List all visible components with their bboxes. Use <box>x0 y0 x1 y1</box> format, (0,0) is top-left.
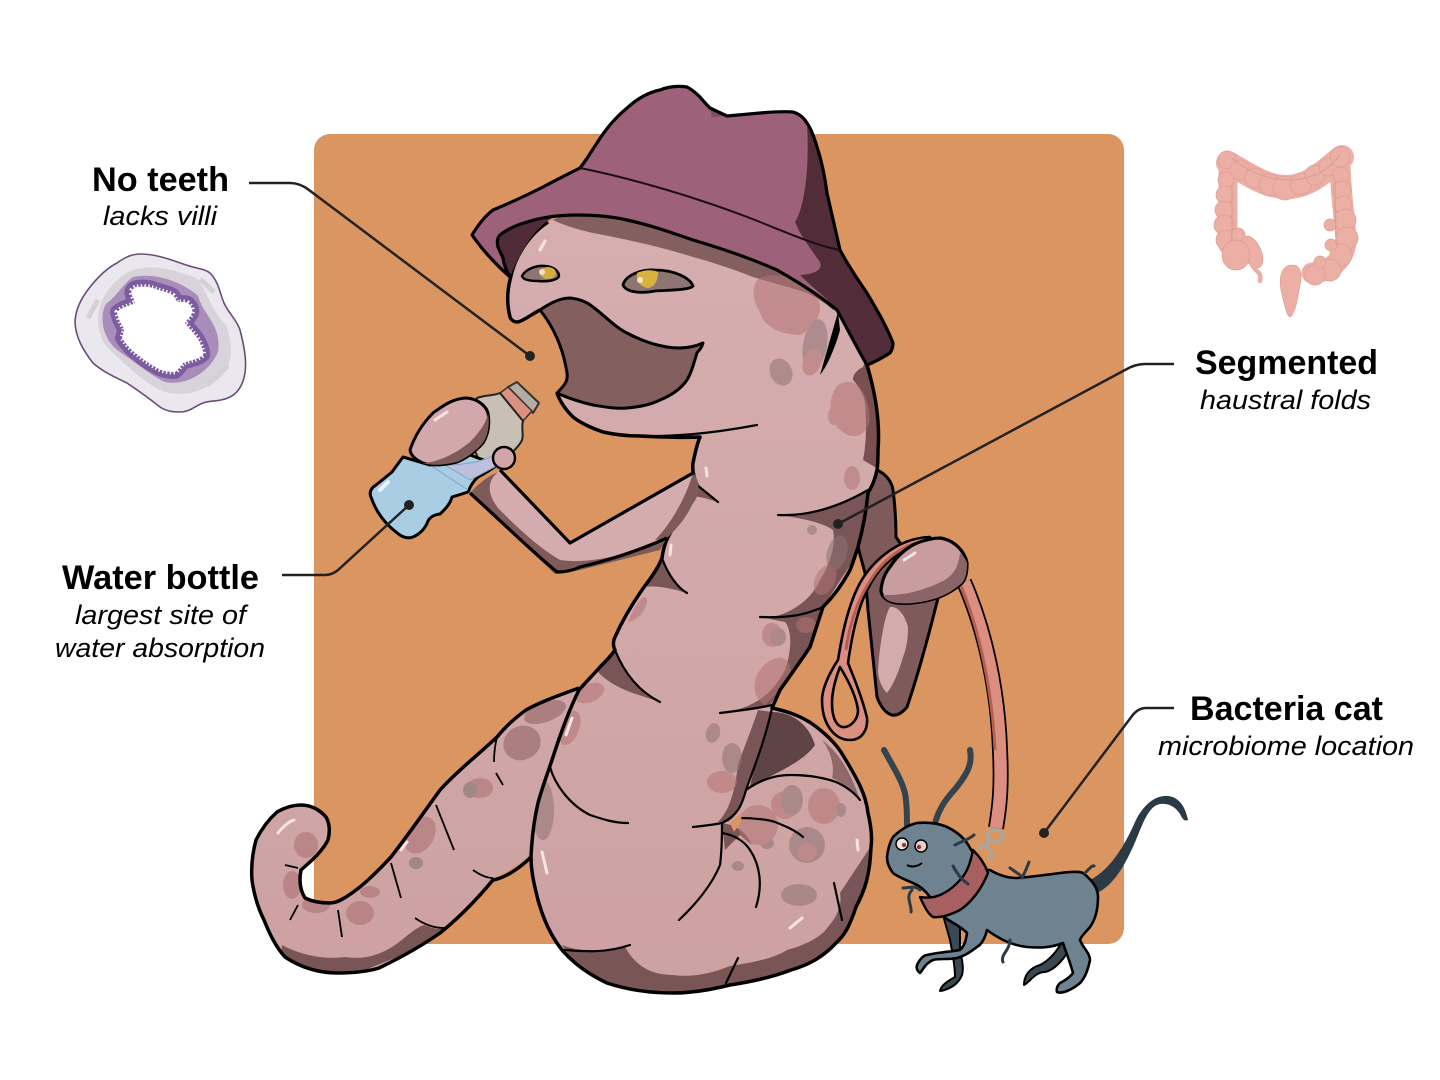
shadows and patches on body <box>532 190 885 1000</box>
leader: water bottle <box>282 500 414 575</box>
tail of worm <box>252 688 590 980</box>
cat bacteria hairs <box>903 835 1094 962</box>
label: segmented: haustral folds <box>1200 385 1371 415</box>
leader: segmented <box>833 364 1174 529</box>
cat collar <box>920 850 988 917</box>
label: bacteria cat: Bacteria cat <box>1190 690 1383 728</box>
cat mouth <box>907 863 922 866</box>
label: water bottle: largest site of <box>75 600 249 630</box>
label: bacteria cat <box>1158 690 1414 761</box>
bottle neck <box>500 387 532 421</box>
cat back legs <box>940 915 963 991</box>
small gap between coils <box>730 812 742 832</box>
tail shadow and patches <box>280 695 569 980</box>
lumen <box>117 287 203 372</box>
fist <box>410 398 489 465</box>
label: no teeth <box>92 161 229 231</box>
label: segmented <box>1195 344 1378 415</box>
bottle cap <box>508 382 539 413</box>
leader: no teeth <box>249 183 535 361</box>
thumb <box>493 447 515 469</box>
label: no teeth: No teeth <box>92 161 229 199</box>
body highlights <box>542 468 858 928</box>
mouth <box>540 298 703 408</box>
cat head <box>887 823 985 912</box>
label: water bottle: water absorption <box>55 633 265 663</box>
hat outline <box>472 86 893 365</box>
label: water bottle: Water bottle <box>62 559 259 597</box>
right eye <box>623 270 693 292</box>
cat tail <box>1090 796 1188 893</box>
back fist <box>881 538 967 603</box>
hat shaded parts <box>497 218 552 277</box>
icon: tissue cross-section <box>75 254 246 412</box>
illustration: back arm <box>858 470 938 715</box>
worm body <box>508 190 885 1000</box>
villi ring <box>117 287 203 372</box>
neck right shadow <box>853 363 877 468</box>
leash loop strap <box>822 537 930 740</box>
leash clip <box>977 830 1003 860</box>
tail outline <box>252 688 579 973</box>
shadow under hat <box>553 216 834 310</box>
hat band line <box>580 168 840 250</box>
water bottle <box>370 382 539 538</box>
bottle water <box>370 455 497 538</box>
label: segmented: Segmented <box>1195 344 1378 382</box>
label: bacteria cat: microbiome location <box>1158 731 1414 761</box>
leash right strap <box>961 582 1001 828</box>
panel: orange background <box>314 134 1124 944</box>
eyes <box>522 241 693 292</box>
left eye <box>522 266 559 281</box>
body folds <box>550 425 868 983</box>
cat body <box>917 860 1098 993</box>
cat eyes <box>896 838 908 850</box>
label: water bottle <box>55 559 265 663</box>
label: no teeth: lacks villi <box>103 201 218 231</box>
forearm light area <box>878 607 908 693</box>
cat antennae <box>884 750 971 833</box>
bacteria cat <box>884 750 1188 993</box>
hat <box>472 86 893 375</box>
leader: bacteria cat <box>1039 708 1174 838</box>
body outline <box>508 222 879 993</box>
bottle upper <box>470 393 523 462</box>
front arm <box>410 398 699 574</box>
icon: colon anatomy <box>1214 147 1358 317</box>
